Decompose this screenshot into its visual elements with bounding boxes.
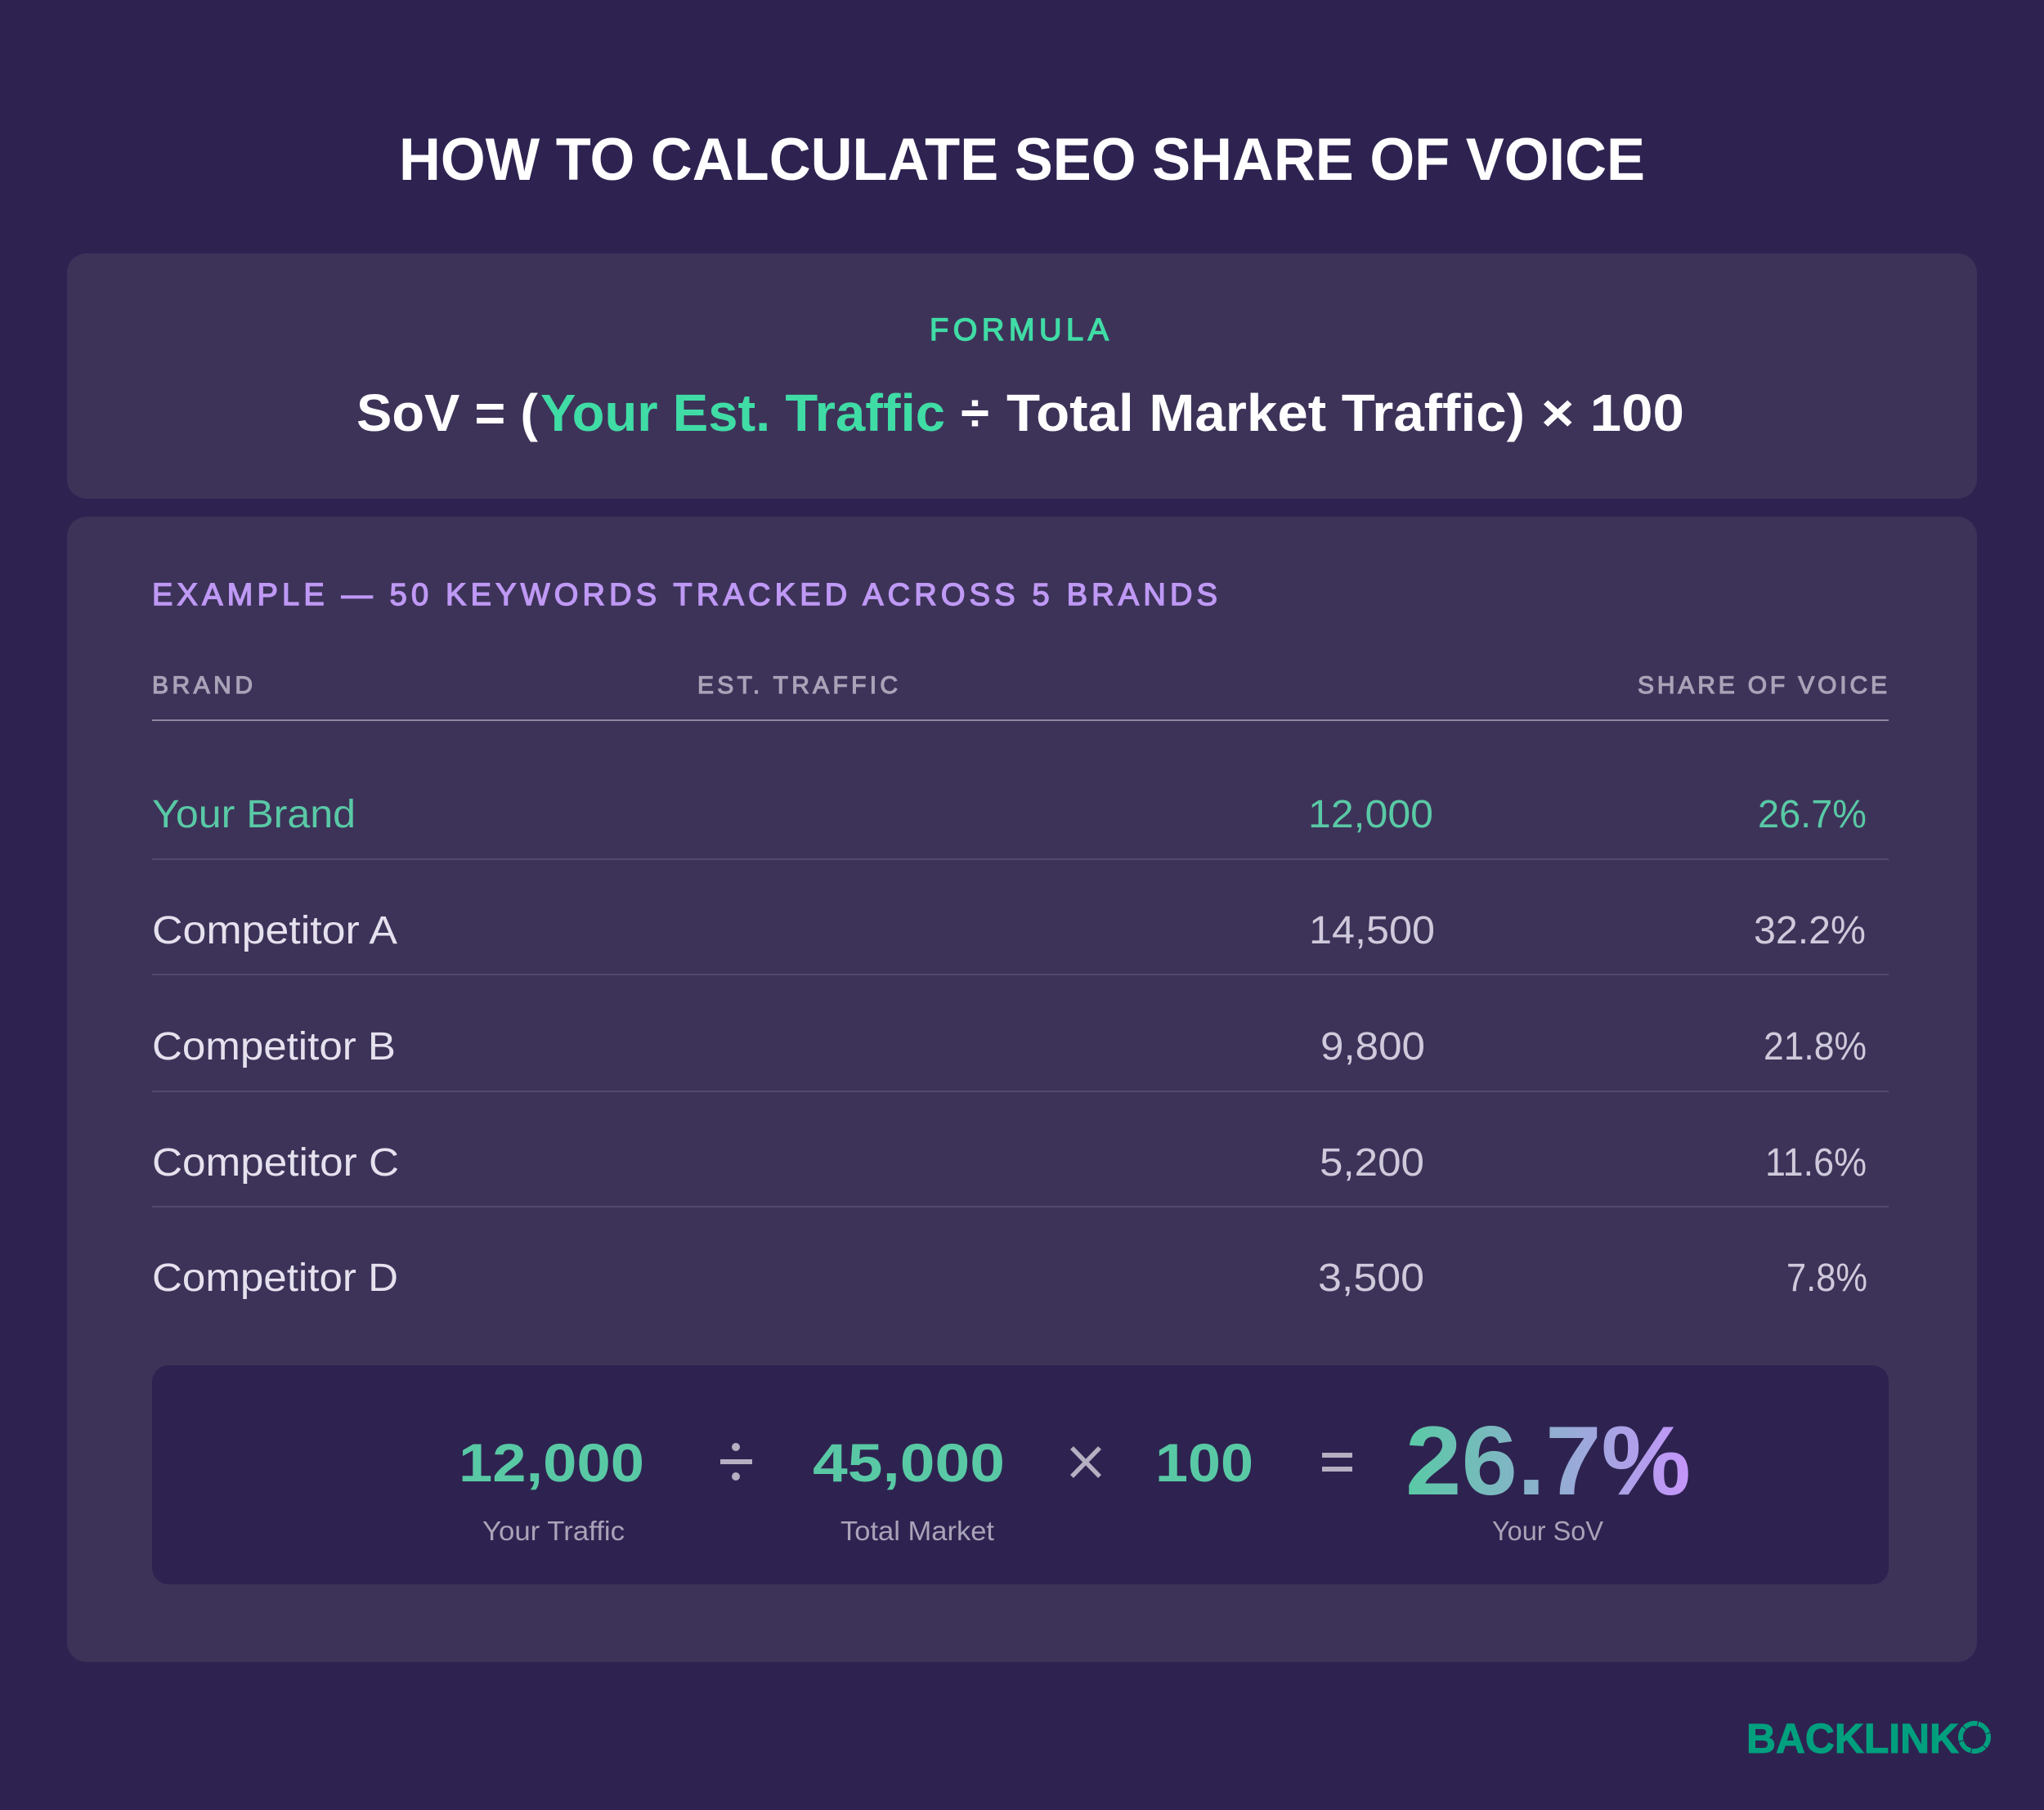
row: Competitor C: Competitor C <box>152 1141 399 1185</box>
title: HOW TO CALCULATE SEO SHARE OF VOICE <box>399 127 1645 193</box>
formula expression: Total Market Traffic) <box>1006 383 1525 442</box>
value: total market: 45,000 <box>813 1432 1005 1493</box>
operator: multiply <box>1072 1448 1100 1476</box>
formula expression: × 100 <box>1541 383 1684 442</box>
value: your traffic: Your Traffic <box>482 1516 625 1546</box>
row: Competitor A <box>152 909 1866 952</box>
row: Your Brand: Your Brand <box>152 793 356 836</box>
example heading: EXAMPLE — 50 KEYWORDS TRACKED ACROSS 5 BRANDS <box>152 578 1217 612</box>
row: Competitor C: 11.6% <box>1765 1141 1867 1185</box>
row: Competitor A: Competitor A <box>152 909 397 952</box>
result: your share of voice: Your SoV <box>1492 1516 1603 1546</box>
operator: divide <box>720 1443 752 1481</box>
value: total market <box>813 1432 1005 1546</box>
row: Competitor D <box>152 1257 1867 1300</box>
panel: formula <box>67 253 1977 499</box>
value: 100: 100 <box>1155 1432 1253 1493</box>
result: your share of voice: 26.7% <box>1405 1406 1691 1516</box>
row: Your Brand: 26.7% <box>1758 793 1867 836</box>
formula expression: ÷ <box>961 383 989 442</box>
formula expression: Your Est. Traffic <box>540 383 945 442</box>
row: Competitor B: 21.8% <box>1764 1025 1867 1069</box>
operator: equals <box>1322 1453 1352 1472</box>
panel: example table <box>67 517 1977 1662</box>
row: Your Brand: 12,000 <box>1308 793 1433 836</box>
row: Competitor B: Competitor B <box>152 1025 396 1069</box>
row: Competitor B <box>152 1025 1867 1069</box>
row: Competitor C: 5,200 <box>1320 1141 1424 1185</box>
panel: worked calculation <box>152 1365 1889 1584</box>
logo: Backlinko: BACKLINK <box>1746 1715 1959 1762</box>
value: your traffic <box>459 1432 644 1546</box>
table header: BRAND <box>152 672 253 699</box>
row: Competitor D: 3,500 <box>1318 1257 1424 1300</box>
row: Competitor D: Competitor D <box>152 1257 398 1300</box>
row: Competitor A: 32.2% <box>1754 909 1866 952</box>
row: Competitor D: 7.8% <box>1786 1257 1867 1300</box>
value: total market: Total Market <box>840 1516 994 1546</box>
formula expression <box>356 383 1684 442</box>
row: Your Brand <box>152 793 1867 836</box>
row: Competitor A: 14,500 <box>1309 909 1435 952</box>
table header: SHARE OF VOICE <box>1638 672 1887 699</box>
table header <box>152 672 1887 699</box>
value: your traffic: 12,000 <box>459 1432 644 1493</box>
formula label: FORMULA <box>930 313 1109 347</box>
formula expression: SoV = ( <box>356 383 539 442</box>
row: Competitor C <box>152 1141 1867 1185</box>
table header: EST. TRAFFIC <box>697 672 898 699</box>
row: Competitor B: 9,800 <box>1320 1025 1425 1069</box>
